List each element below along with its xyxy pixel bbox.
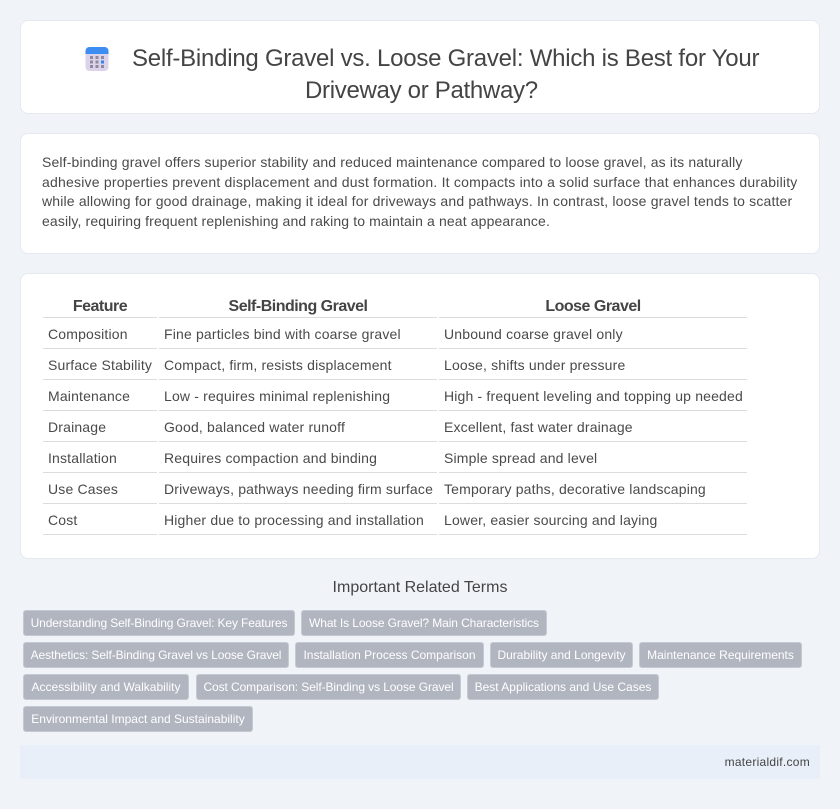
tag (23, 674, 189, 700)
row: cost: Lower, easier sourcing and laying (444, 512, 657, 528)
row: use cases (43, 481, 747, 504)
row: installation (43, 450, 747, 473)
tag: Environmental Impact and Sustainability (31, 712, 245, 726)
intro paragraph (42, 154, 798, 229)
row: drainage: Excellent, fast water drainage (444, 419, 633, 435)
row: use cases: Temporary paths, decorative landscaping (444, 481, 706, 497)
related term tags (23, 610, 802, 732)
row: surface stability: Loose, shifts under pressure (444, 357, 625, 373)
tag: Installation Process Comparison (303, 648, 476, 662)
row: drainage: Drainage (48, 419, 106, 435)
tag (196, 674, 461, 700)
panel: title header (20, 20, 820, 114)
panel: introduction text (20, 133, 820, 254)
row: drainage (43, 419, 747, 442)
footer bar (20, 745, 820, 779)
intro paragraph: Self-binding gravel offers superior stability and reduced maintenance compared to loose gravel, as its naturally (42, 154, 743, 170)
intro paragraph: adhesive properties prevent displacement and dust formation. It compacts into a solid surface that enhances durability (42, 174, 798, 190)
tag: Accessibility and Walkability (32, 680, 180, 694)
row: use cases: Use Cases (48, 481, 118, 497)
row: cost: Cost (48, 512, 77, 528)
title: Driveway or Pathway? (305, 77, 538, 104)
tag (23, 642, 289, 668)
row: use cases: Driveways, pathways needing firm surface (164, 481, 433, 497)
intro paragraph: while allowing for good drainage, making it ideal for driveways and pathways. In contrast, loose gravel tends to scatter (42, 193, 792, 209)
tag (490, 642, 633, 668)
heading: related terms: Important Related Terms (333, 579, 507, 596)
tag: What Is Loose Gravel? Main Characteristics (309, 616, 539, 630)
tag (23, 610, 295, 636)
row: surface stability (43, 357, 747, 380)
table header row: Feature (73, 298, 127, 315)
row: installation: Requires compaction and binding (164, 450, 377, 466)
tag (301, 610, 547, 636)
title: Self-Binding Gravel vs. Loose Gravel: Which is Best for Your (132, 45, 759, 72)
row: maintenance (43, 388, 747, 411)
tag: Best Applications and Use Cases (475, 680, 651, 694)
row: drainage: Good, balanced water runoff (164, 419, 345, 435)
tag: Cost Comparison: Self-Binding vs Loose Gravel (203, 680, 454, 694)
tag: Maintenance Requirements (647, 648, 794, 662)
table header row: Self-Binding Gravel (229, 298, 367, 315)
row: maintenance: Low - requires minimal replenishing (164, 388, 390, 404)
table header row: Loose Gravel (545, 298, 641, 315)
intro paragraph: easily, requiring frequent replenishing and raking to maintain a neat appearance. (42, 213, 550, 229)
row: surface stability: Surface Stability (48, 357, 152, 373)
row: composition: Fine particles bind with coarse gravel (164, 326, 401, 342)
tag (295, 642, 484, 668)
icon: calendar (86, 47, 108, 71)
title (132, 45, 760, 104)
row: composition: Composition (48, 326, 128, 342)
row: composition (43, 326, 747, 349)
row: cost (43, 512, 747, 535)
tag: Understanding Self-Binding Gravel: Key Features (31, 616, 287, 630)
tag: Aesthetics: Self-Binding Gravel vs Loose Gravel (31, 648, 281, 662)
comparison table (43, 298, 747, 535)
tag: Durability and Longevity (497, 648, 626, 662)
row: maintenance: High - frequent leveling and topping up needed (444, 388, 743, 404)
row: composition: Unbound coarse gravel only (444, 326, 623, 342)
row: surface stability: Compact, firm, resists displacement (164, 357, 392, 373)
row: installation: Simple spread and level (444, 450, 597, 466)
footer site name: materialdif.com (725, 755, 810, 769)
table header row (43, 298, 747, 318)
row: installation: Installation (48, 450, 117, 466)
tag (639, 642, 802, 668)
tag (467, 674, 659, 700)
panel: comparison table (20, 273, 820, 559)
row: cost: Higher due to processing and installation (164, 512, 424, 528)
row: maintenance: Maintenance (48, 388, 130, 404)
tag (23, 706, 253, 732)
